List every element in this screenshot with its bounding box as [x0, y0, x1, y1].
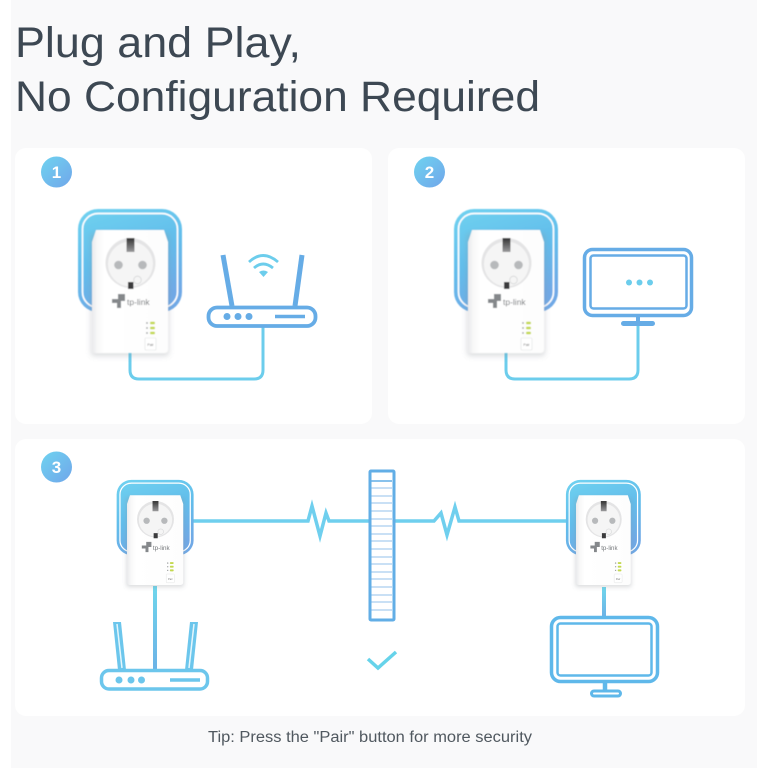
cable: left adapter to router	[153, 586, 157, 670]
icon: wifi	[249, 256, 278, 277]
step badge 2: 2	[425, 163, 434, 182]
title	[15, 19, 540, 121]
adapter right: tp-link	[601, 545, 618, 552]
adapter right	[566, 480, 641, 587]
panel: step 1	[15, 148, 372, 424]
adapter left: Pair	[168, 577, 173, 581]
step badge 2	[414, 156, 445, 188]
adapter: Pair	[147, 343, 154, 347]
router icon	[102, 622, 208, 689]
icon: check mark	[368, 652, 396, 668]
title: Plug and Play,	[15, 19, 301, 67]
cable: adapter to router	[130, 326, 263, 379]
adapter	[454, 209, 558, 356]
panel: step 2	[388, 148, 745, 424]
tip text: Tip: Press the "Pair" button for more security	[208, 729, 532, 746]
adapter: tp-link	[127, 297, 150, 307]
step badge 1: 1	[52, 163, 61, 182]
cable: right adapter to monitor	[602, 587, 606, 617]
wall icon	[370, 471, 394, 620]
step badge 1	[41, 156, 72, 188]
step badge 3	[41, 452, 72, 482]
adapter right: Pair	[616, 578, 620, 581]
title: No Configuration Required	[15, 73, 540, 121]
powerline: left adapter to wall	[193, 506, 369, 536]
adapter: tp-link	[503, 297, 526, 307]
powerline: wall to right adapter	[394, 507, 566, 535]
cable: adapter to screen	[506, 325, 638, 379]
adapter left	[117, 480, 194, 587]
adapter: Pair	[523, 343, 530, 347]
adapter left: tp-link	[153, 545, 171, 552]
router icon	[208, 255, 316, 326]
monitor icon	[552, 618, 658, 696]
adapter	[78, 209, 182, 356]
panel: step 3	[15, 439, 745, 716]
step badge 3: 3	[52, 458, 61, 477]
monitor icon	[584, 250, 692, 326]
